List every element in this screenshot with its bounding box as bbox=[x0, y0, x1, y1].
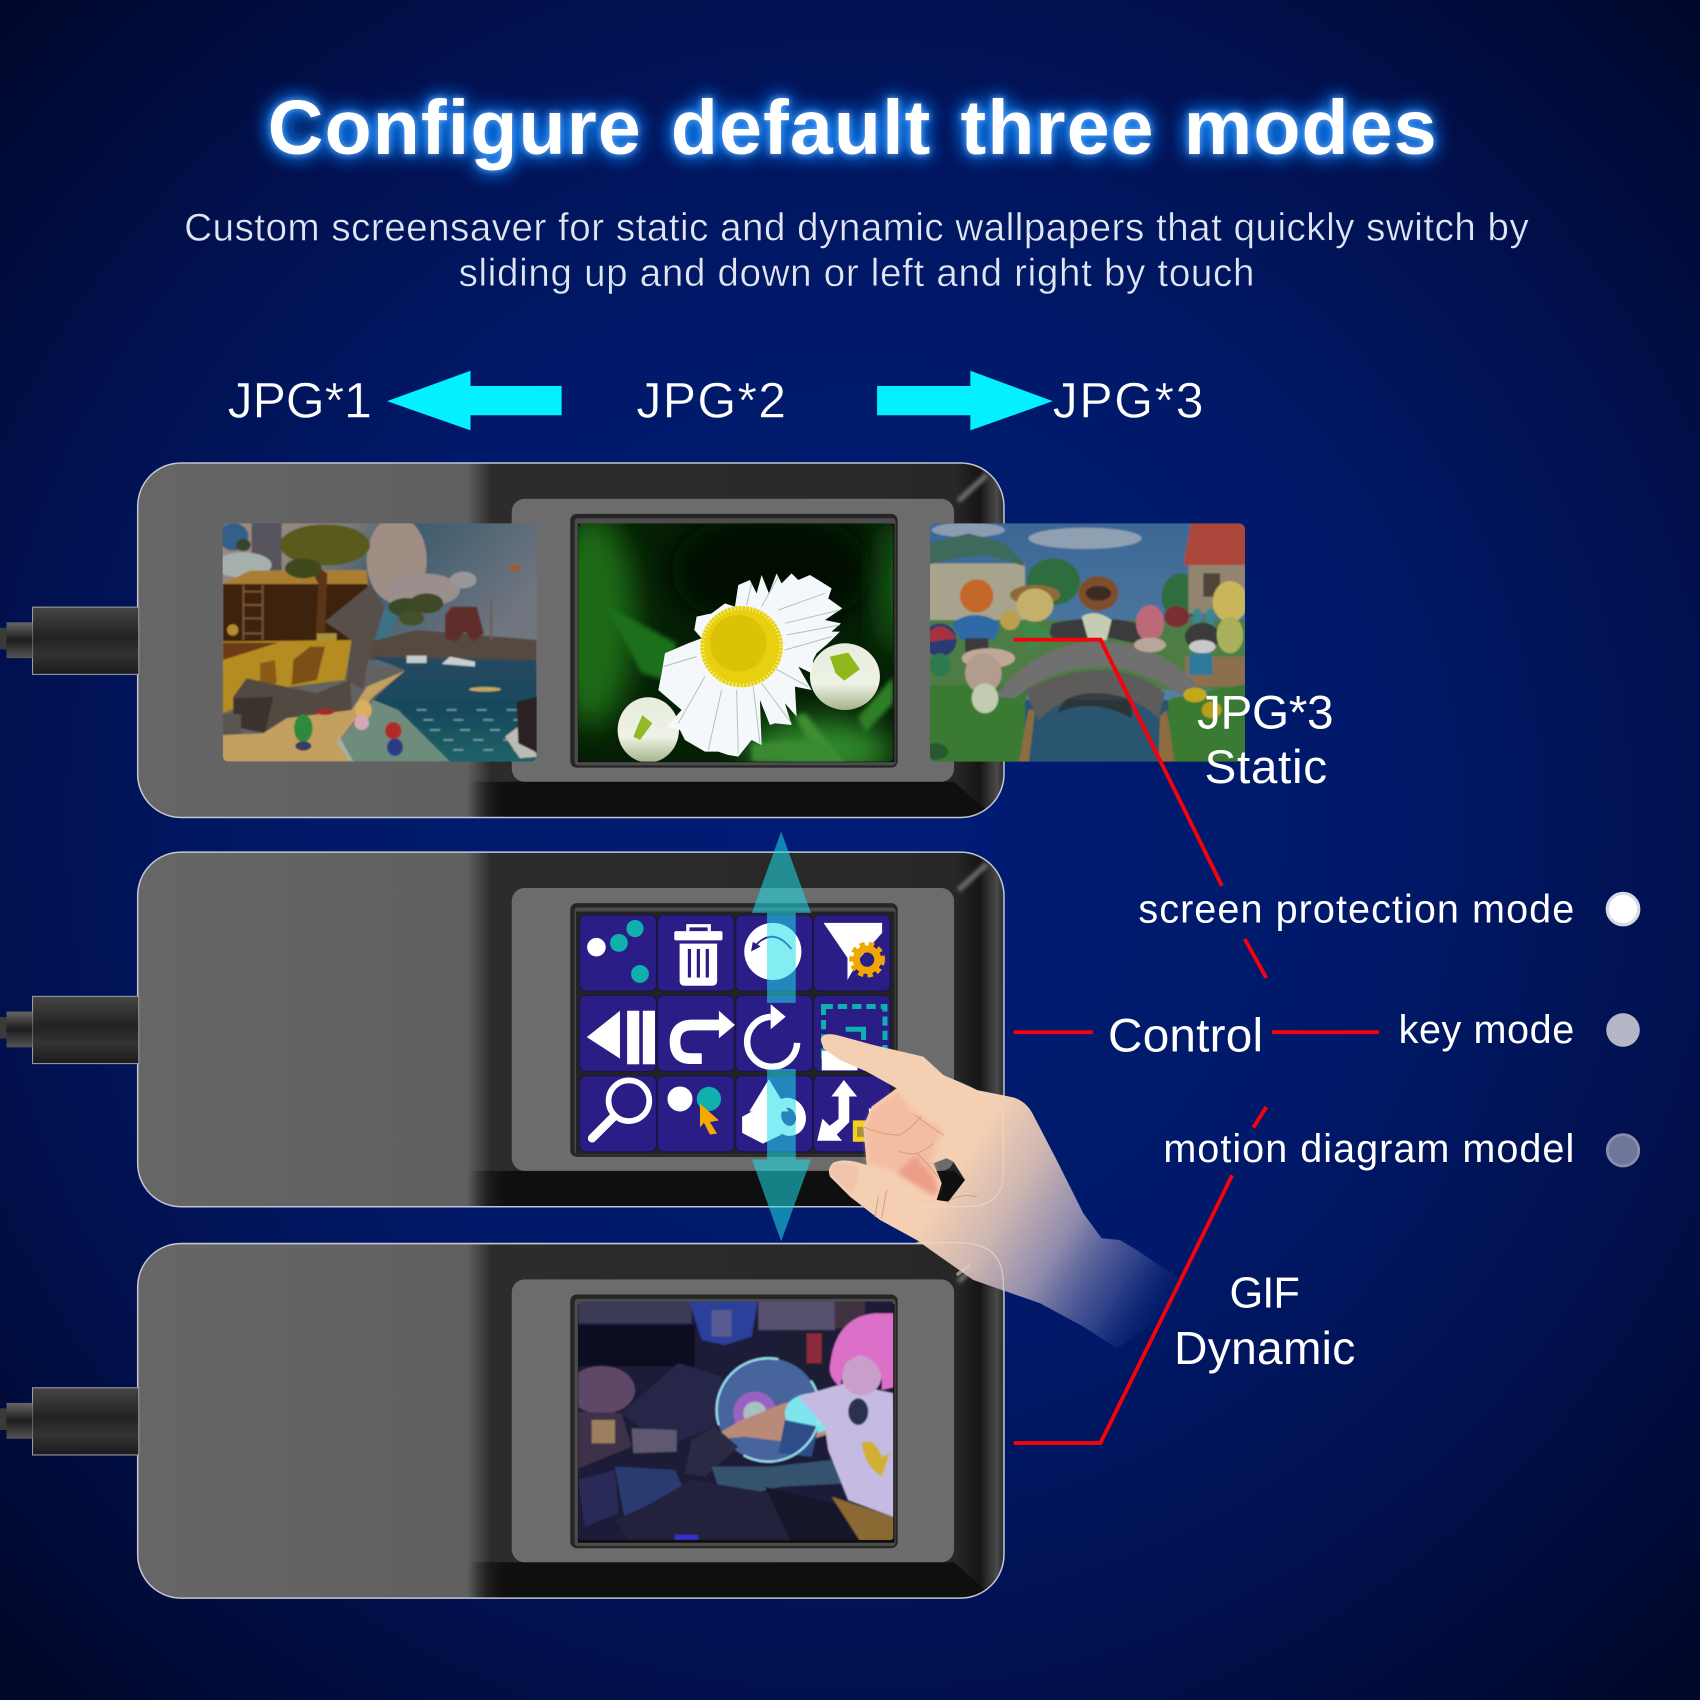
label: JPG*3 Static bbox=[1197, 687, 1334, 794]
label: GIF Dynamic: Dynamic bbox=[1174, 1322, 1355, 1374]
hand skin detail bbox=[865, 1092, 942, 1196]
key grid bbox=[576, 911, 894, 1154]
arrow: left bbox=[387, 371, 562, 430]
yellow disc bbox=[700, 606, 783, 687]
screenshot: island villagers right bbox=[922, 520, 1248, 765]
arrow: right bbox=[877, 371, 1053, 430]
hand bbox=[821, 1034, 1203, 1348]
icon: previous bbox=[587, 1011, 655, 1064]
icon: rotate circle bbox=[744, 923, 801, 980]
icon: filter gear bbox=[824, 923, 883, 980]
icon: magnifier bbox=[592, 1080, 649, 1138]
icon: u-turn arrow bbox=[675, 1011, 735, 1059]
device: dynamic mode bbox=[0, 1244, 1004, 1607]
double vertical arrow bbox=[752, 832, 811, 1241]
label: JPG*3 top: JPG*3 bbox=[1053, 372, 1203, 428]
icon: dots bbox=[587, 920, 649, 983]
subtitle: sliding up and down or left and right by touch bbox=[459, 252, 1254, 295]
icon: cursor dots bbox=[667, 1086, 721, 1135]
label: GIF Dynamic: GIF bbox=[1229, 1270, 1300, 1318]
icon: dashed select bbox=[822, 1006, 885, 1070]
device outline over hand bbox=[917, 1075, 1003, 1292]
buds bbox=[810, 643, 880, 710]
label: GIF Dynamic bbox=[1174, 1270, 1355, 1374]
legend: screen protection mode: screen protection mode bbox=[1138, 888, 1574, 932]
legend: motion diagram model: motion diagram model bbox=[1163, 1127, 1574, 1171]
label: JPG*2: JPG*2 bbox=[636, 372, 786, 428]
screenshot: game landscape left bbox=[215, 517, 540, 763]
label: JPG*1: JPG*1 bbox=[228, 372, 372, 428]
title: Configure default three modes bbox=[268, 85, 1437, 171]
icon: trash can bbox=[674, 926, 722, 986]
icon: split arrows bbox=[817, 1080, 881, 1142]
icon: 3d shapes bbox=[742, 1079, 805, 1144]
subtitle bbox=[184, 207, 1529, 295]
petals bbox=[658, 573, 842, 757]
icon: redo bbox=[747, 1004, 797, 1067]
subtitle: Custom screensaver for static and dynamic wallpapers that quickly switch by bbox=[184, 207, 1529, 250]
device: key mode bbox=[0, 852, 1004, 1215]
screenshot: daisy flower bbox=[578, 523, 894, 762]
key tiles bbox=[580, 915, 890, 1152]
device: static mode bbox=[0, 463, 1004, 826]
screenshot: anime mech girl bbox=[568, 1298, 897, 1543]
red callout lines bbox=[1014, 640, 1379, 1443]
label: JPG*3 Static: Static bbox=[1205, 741, 1327, 794]
legend: key mode: key mode bbox=[1399, 1008, 1574, 1052]
label: JPG*3 Static: JPG*3 bbox=[1197, 687, 1334, 740]
label: Control: Control bbox=[1108, 1010, 1263, 1063]
